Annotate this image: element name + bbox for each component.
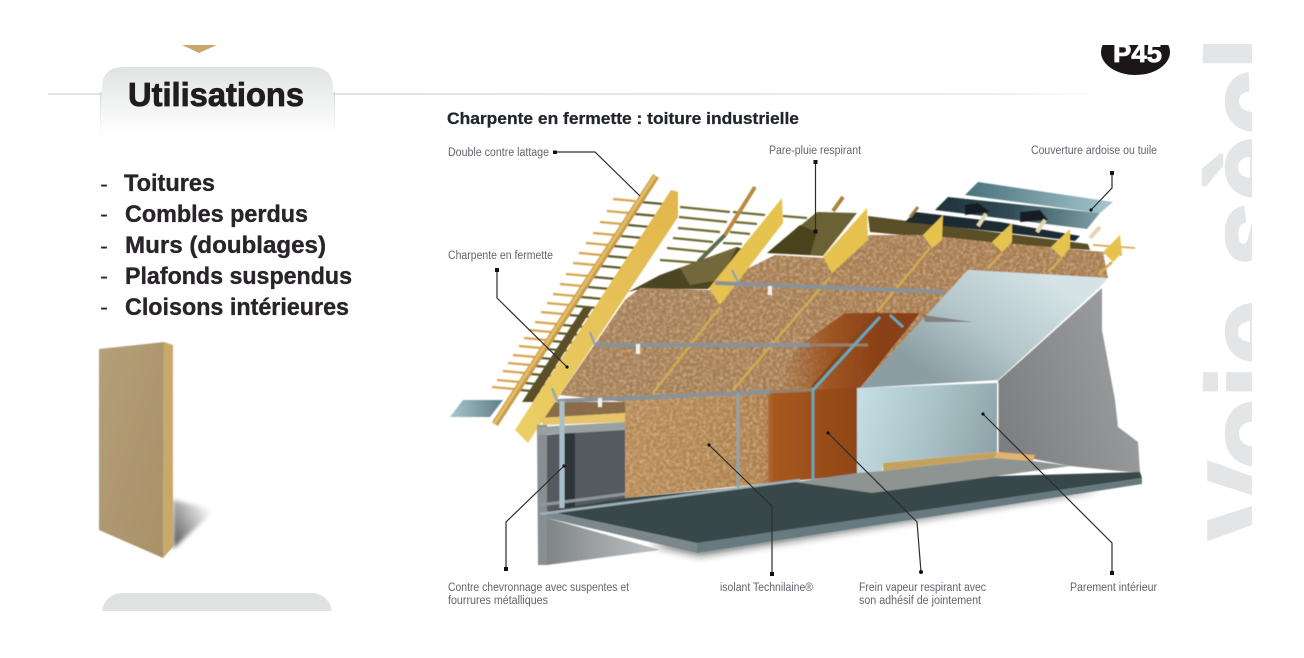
infographic canvas: [48, 44, 1252, 611]
pare-pluie membrane: [522, 212, 1090, 402]
label: parement intérieur: Parement intérieur: [1070, 582, 1157, 594]
list of uses: -: [100, 171, 108, 198]
next section tab (cropped): [102, 593, 332, 611]
wool insulation between rafters: [540, 235, 1108, 418]
label: double contre lattage: Double contre lattage: [448, 147, 549, 159]
leader: contre chevronnage: [504, 464, 566, 571]
shadow under slab: [650, 490, 1100, 556]
floor slab: [547, 472, 1142, 553]
leader: charpente: [495, 268, 569, 369]
wall insulation: [625, 387, 857, 498]
leader: parement: [981, 412, 1114, 575]
label: contre chevronnage: fourrures métalliques: [448, 595, 548, 607]
rafter end cuts: [709, 198, 1122, 305]
label: charpente en fermette: Charpente en fermette: [448, 250, 553, 262]
skirting plank: [883, 452, 1035, 471]
metal furring rails: [540, 270, 945, 514]
label: frein vapeur: Frein vapeur respirant avec: [859, 582, 986, 594]
label: contre chevronnage: Contre chevronnage avec suspentes et: [448, 582, 630, 594]
laths and counter-battens: [492, 176, 1135, 424]
heading tab: Utilisations: [100, 67, 335, 136]
roof and wall cutaway diagram: [450, 176, 1142, 565]
label: couverture ardoise ou tuile: Couverture ardoise ou tuile: [1031, 145, 1157, 157]
page badge P45: P45: [1113, 38, 1162, 68]
label: frein vapeur: son adhésif de jointement: [859, 595, 982, 607]
tile sheet lower left: [450, 400, 503, 417]
label: frein vapeur: [859, 582, 986, 607]
side wall: [998, 288, 1140, 473]
list of uses: Murs (doublages): [125, 232, 326, 259]
label: pare-pluie respirant: Pare-pluie respirant: [769, 145, 862, 157]
list of uses: -: [100, 263, 108, 290]
list of uses: [100, 170, 352, 321]
leader: isolant: [707, 443, 774, 576]
thin rafter edges in insulation: [653, 248, 1112, 393]
header rule: [48, 93, 1103, 95]
small tan triangle at top: [182, 45, 217, 53]
insulation panel product photo: [99, 342, 215, 558]
list of uses: Cloisons intérieures: [125, 294, 349, 321]
leader: pare-pluie: [814, 160, 818, 234]
list of uses: Toitures: [124, 170, 215, 197]
slate covering: [905, 182, 1113, 241]
heading tab: Utilisations: Utilisations: [128, 76, 304, 113]
leader line: double contre lattage: [555, 152, 640, 196]
floor board: [795, 458, 1070, 493]
label: contre chevronnage: [448, 582, 630, 607]
ceiling board: [860, 270, 1108, 388]
diagram title: Charpente en fermette : toiture industrielle: [447, 110, 799, 128]
main yellow rafter: [515, 190, 678, 443]
leader: frein vapeur: [826, 431, 923, 574]
list of uses: -: [100, 294, 108, 321]
label: isolant Technilaine: isolant Technilaine®: [720, 582, 813, 594]
concrete wall and lintel: [537, 413, 660, 565]
list of uses: Plafonds suspendus: [125, 263, 352, 290]
marker: double contre lattage: [553, 150, 557, 154]
back wall: [857, 383, 997, 473]
list of uses: -: [100, 233, 108, 260]
list of uses: -: [100, 201, 108, 228]
list of uses: Combles perdus: [125, 201, 308, 228]
leader: couverture: [1089, 171, 1114, 212]
page badge P45: [1101, 45, 1170, 75]
